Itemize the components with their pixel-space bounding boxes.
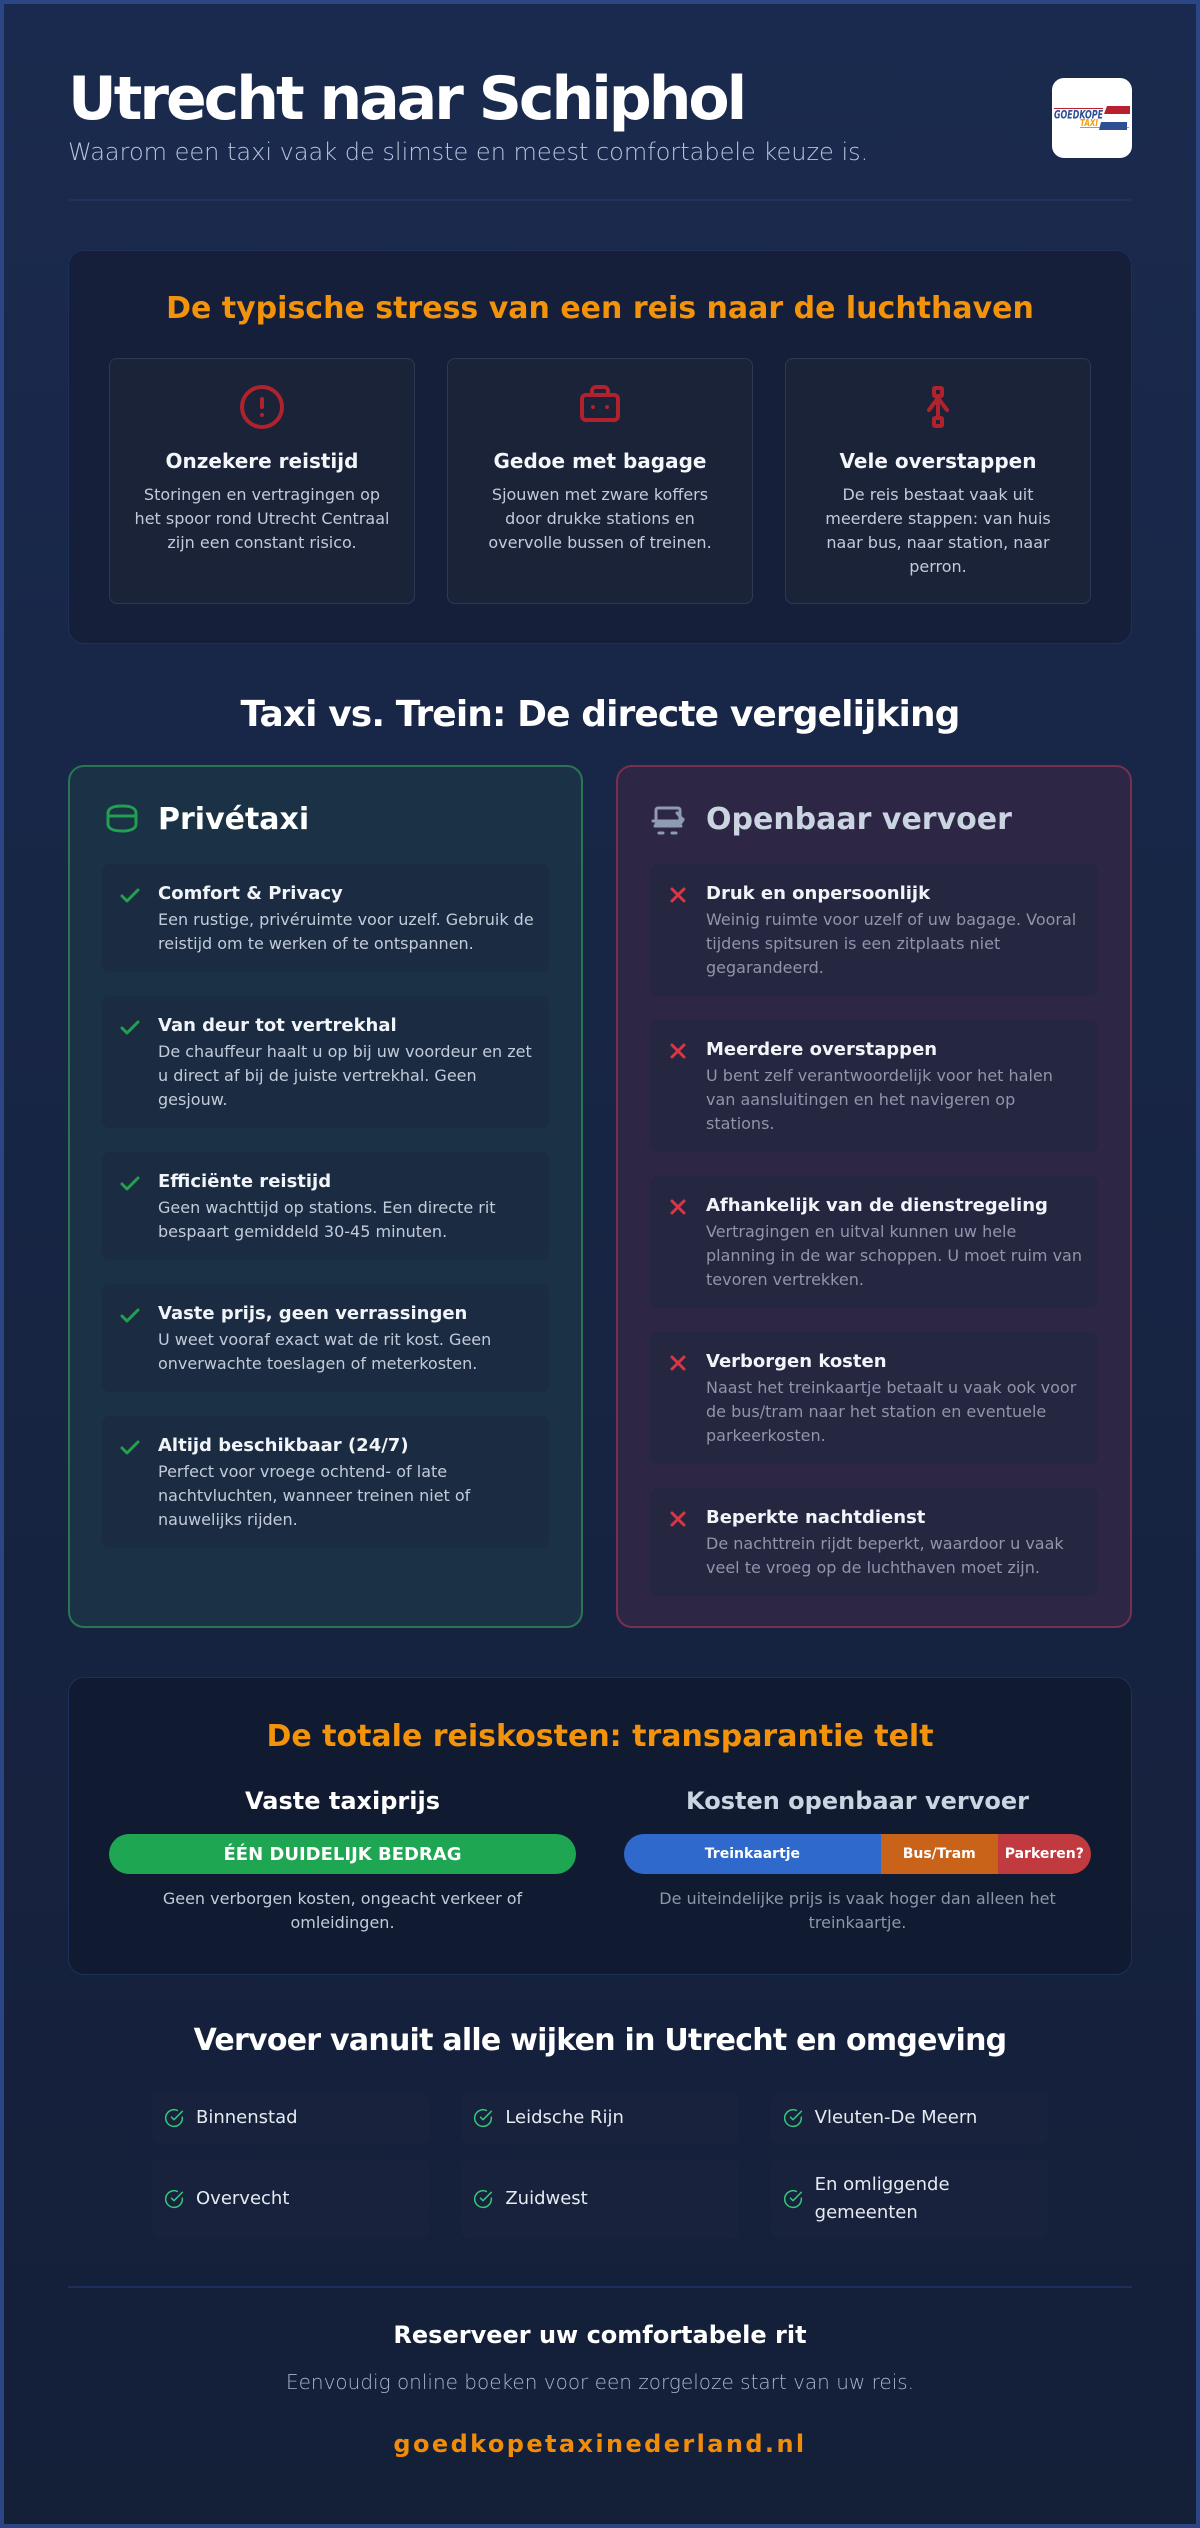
card: onzekere reistijd (109, 358, 415, 604)
card: bagage (447, 358, 753, 604)
card: overstappen (785, 358, 1091, 604)
icon: taxi (106, 804, 138, 832)
drawback: dienstregeling (650, 1176, 1098, 1308)
logo: TAXI (1080, 118, 1098, 129)
subtitle: Waarom een taxi vaak de slimste en meest comfortabele keuze is. (68, 138, 868, 166)
drawback: kosten (650, 1332, 1098, 1464)
drawback: dienstregeling: Afhankelijk van de dienstregeling (706, 1195, 1048, 1216)
drawback: dienstregeling: Vertragingen en uitval kunnen uw hele planning in de war schoppen. U moet ruim van tevoren vertrekken. (706, 1222, 1082, 1289)
benefit: beschikbaar: Perfect voor vroege ochtend- of late nachtvluchten, wanneer treinen niet of nauwelijks rijden. (158, 1462, 470, 1529)
header divider (68, 199, 1132, 201)
panel: stress (68, 250, 1132, 644)
benefit: beschikbaar: Altijd beschikbaar (24/7) (158, 1435, 409, 1456)
card heading: Onzekere reistijd (166, 449, 358, 473)
area: binnenstad: Binnenstad (196, 2107, 298, 2128)
benefit: comfort: Comfort & Privacy (158, 883, 343, 904)
area: overvecht (152, 2159, 429, 2239)
area: binnenstad (152, 2092, 429, 2144)
logo (1052, 78, 1132, 158)
drawback: druk (650, 864, 1098, 996)
areas heading: Vervoer vanuit alle wijken in Utrecht en omgeving (194, 2023, 1006, 2058)
footer heading: Reserveer uw comfortabele rit (393, 2321, 807, 2349)
icon: train (652, 806, 684, 834)
benefit: reistijd (102, 1152, 549, 1260)
area: vleuten: Vleuten-De Meern (815, 2107, 977, 2128)
public transport price heading: Kosten openbaar vervoer (686, 1787, 1029, 1815)
stress heading: De typische stress van een reis naar de luchthaven (166, 291, 1034, 326)
drawback: overstappen: U bent zelf verantwoordelijk voor het halen van aansluitingen en het navigeren op stations. (706, 1066, 1053, 1133)
benefit: deur tot vertrekhal: De chauffeur haalt u op bij uw voordeur en zet u direct af bij de juiste vertrekhal. Geen gesjouw. (158, 1042, 532, 1109)
card text: Sjouwen met zware koffers door drukke stations en overvolle bussen of treinen. (488, 485, 712, 552)
drawback: overstappen: Meerdere overstappen (706, 1039, 937, 1060)
drawbacks list (650, 864, 1098, 1596)
footer divider (68, 2286, 1132, 2288)
benefit: reistijd: Geen wachttijd op stations. Een directe rit bespaart gemiddeld 30-45 minuten. (158, 1198, 496, 1241)
area: vleuten (771, 2092, 1048, 2144)
column heading: Privétaxi (158, 802, 309, 837)
benefit: deur tot vertrekhal (102, 996, 549, 1128)
bar: taxi: ÉÉN DUIDELIJK BEDRAG (223, 1844, 462, 1864)
drawback: kosten: Verborgen kosten (706, 1351, 887, 1372)
benefit: deur tot vertrekhal: Van deur tot vertrekhal (158, 1015, 397, 1036)
footer url: goedkopetaxinederland.nl (393, 2430, 807, 2458)
drawback: druk: Weinig ruimte voor uzelf of uw bagage. Vooral tijdens spitsuren is een zitplaats niet gegarandeerd. (706, 910, 1076, 977)
benefit: beschikbaar (102, 1416, 549, 1548)
benefit: comfort (102, 864, 549, 972)
footer text: Eenvoudig online boeken voor een zorgeloze start van uw reis. (286, 2370, 914, 2394)
taxi caption: Geen verborgen kosten, ongeacht verkeer of omleidingen. (163, 1889, 522, 1932)
drawback: nachtdienst: Beperkte nachtdienst (706, 1507, 925, 1528)
area: leidsche rijn (461, 2092, 739, 2144)
bar: public transport costs: Treinkaartje (705, 1846, 800, 1862)
area: gemeenten (771, 2159, 1048, 2239)
logo: GOEDKOPE (1054, 108, 1103, 122)
public transport caption: De uiteindelijke prijs is vaak hoger dan alleen het treinkaartje. (659, 1889, 1056, 1932)
comparison heading: Taxi vs. Trein: De directe vergelijking (240, 694, 960, 734)
card text: De reis bestaat vaak uit meerdere stappen: van huis naar bus, naar station, naar perron. (825, 485, 1051, 576)
panel: reiskosten (68, 1677, 1132, 1975)
benefit: vaste prijs: Vaste prijs, geen verrassingen (158, 1303, 467, 1324)
bar: public transport costs (624, 1834, 1091, 1874)
area: overvecht: Overvecht (196, 2188, 289, 2209)
icon: transfer route (926, 386, 950, 428)
bar: taxi (109, 1834, 576, 1874)
benefit: comfort: Een rustige, privéruimte voor uzelf. Gebruik de reistijd om te werken of te ontspannen. (158, 910, 534, 953)
bar: public transport costs: Parkeren? (1005, 1846, 1084, 1862)
taxi price heading: Vaste taxiprijs (245, 1787, 440, 1815)
benefit: vaste prijs (102, 1284, 549, 1392)
benefits list (120, 883, 534, 1529)
area: zuidwest (461, 2159, 739, 2239)
icon: suitcase (580, 385, 620, 422)
costs heading: De totale reiskosten: transparantie telt (266, 1719, 934, 1754)
benefit: vaste prijs: U weet vooraf exact wat de rit kost. Geen onverwachte toeslagen of meterkosten. (158, 1330, 491, 1373)
drawback: nachtdienst (650, 1488, 1098, 1596)
drawback: nachtdienst: De nachttrein rijdt beperkt, waardoor u vaak veel te vroeg op de luchthaven moet zijn. (706, 1534, 1064, 1577)
bar: public transport costs: Bus/Tram (903, 1846, 976, 1862)
drawback: overstappen (650, 1020, 1098, 1152)
drawback: kosten: Naast het treinkaartje betaalt u vaak ook voor de bus/tram naar het station en eventuele parkeerkosten. (706, 1378, 1076, 1445)
panel: openbaar vervoer (616, 765, 1132, 1628)
benefit: reistijd: Efficiënte reistijd (158, 1171, 331, 1192)
area: leidsche rijn: Leidsche Rijn (505, 2107, 624, 2128)
column heading: Openbaar vervoer (706, 802, 1012, 837)
icon: alert circle (240, 385, 284, 429)
area: gemeenten: En omliggende gemeenten (815, 2174, 950, 2223)
drawback: druk: Druk en onpersoonlijk (706, 883, 930, 904)
title: Utrecht naar Schiphol (68, 64, 744, 134)
card heading: Gedoe met bagage (494, 449, 706, 473)
panel: privetaxi (68, 765, 583, 1628)
area: zuidwest: Zuidwest (505, 2188, 588, 2209)
card heading: Vele overstappen (840, 449, 1036, 473)
card text: Storingen en vertragingen op het spoor rond Utrecht Centraal zijn een constant risico. (135, 485, 389, 552)
